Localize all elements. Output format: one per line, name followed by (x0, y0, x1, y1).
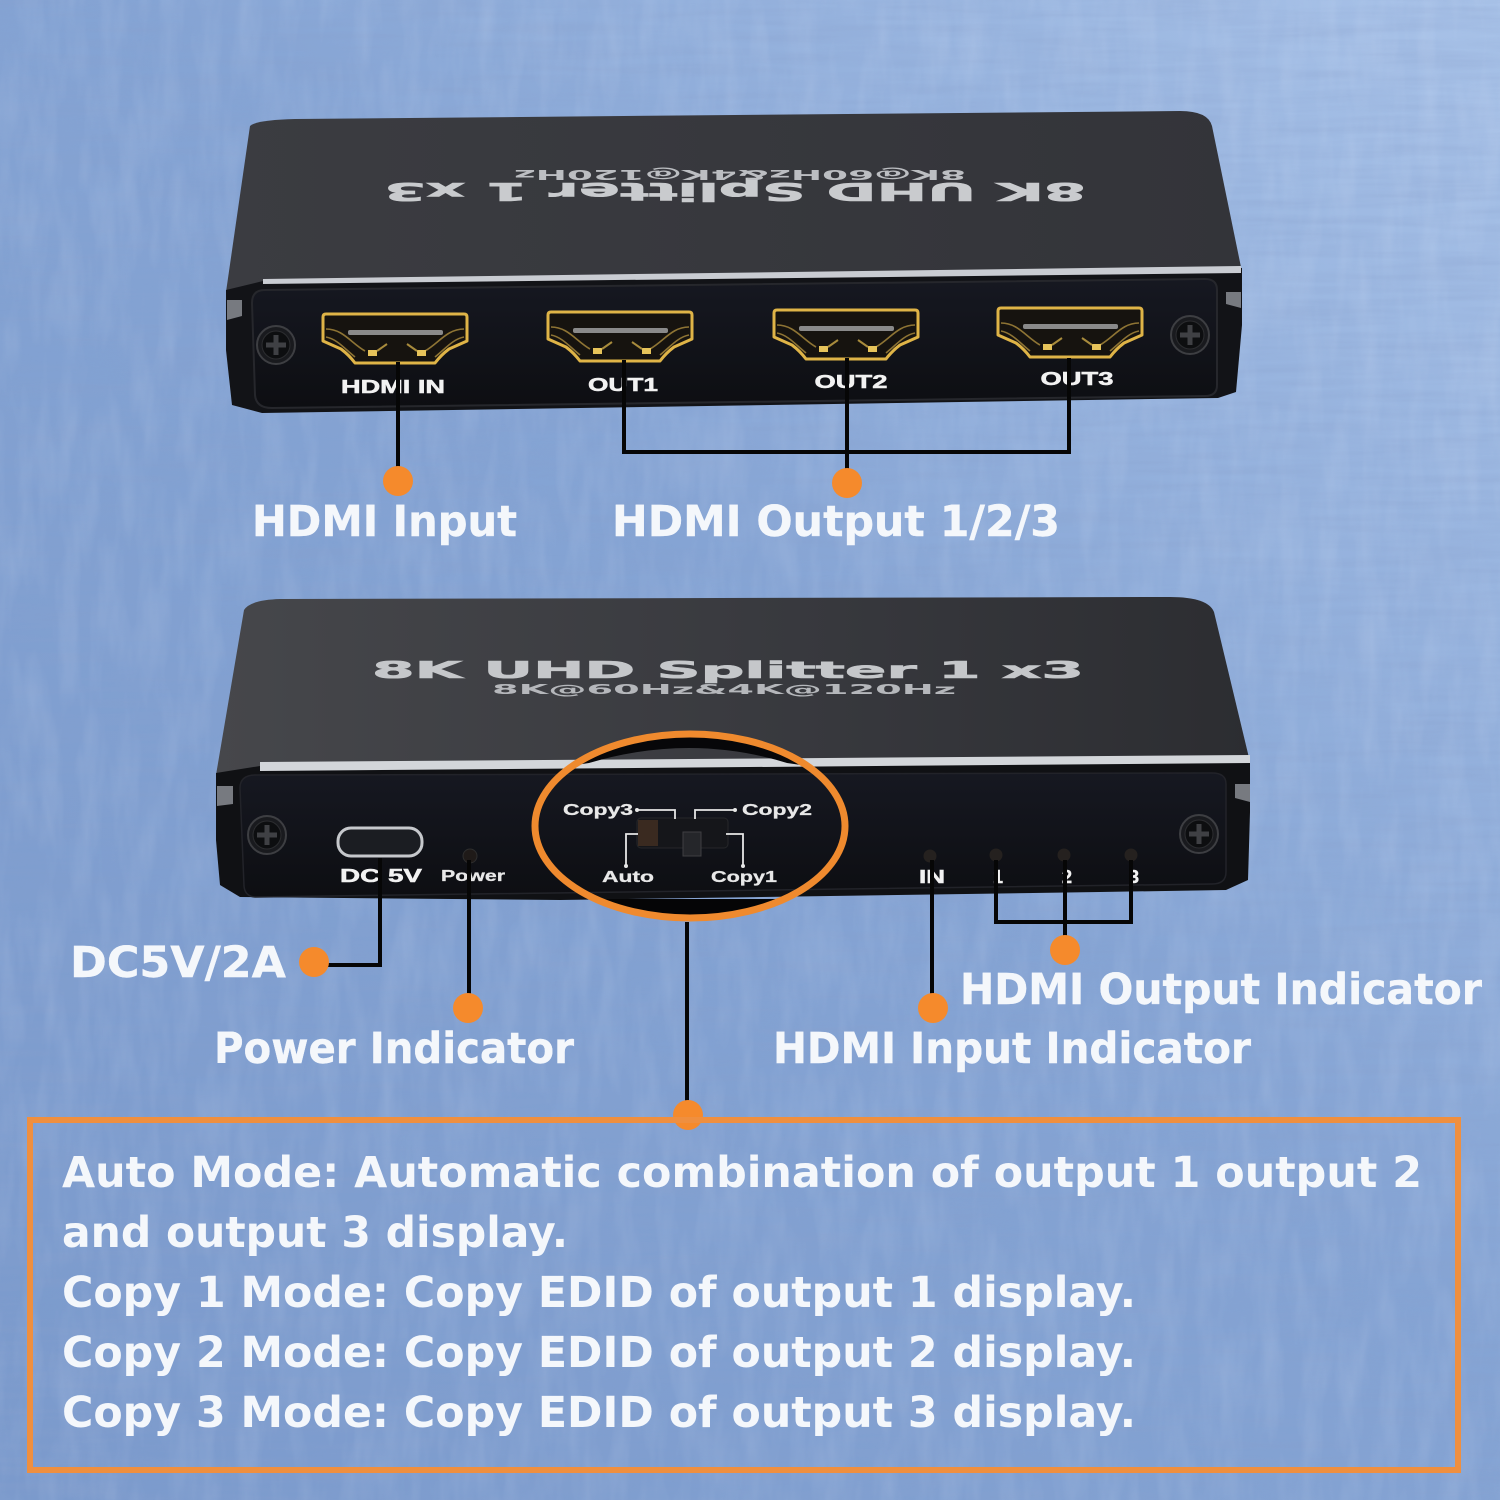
right screw (1180, 815, 1218, 853)
orange ellipse (535, 734, 845, 918)
OUT2 port (774, 310, 918, 359)
upside-down device title: 8K@60Hz&4K@120Hz (514, 166, 966, 181)
port labels: HDMI IN (341, 377, 445, 397)
label: HDMI Input: HDMI Input (252, 497, 517, 547)
callout: HDMI output connector (624, 358, 1069, 498)
callout: mode switch connector (673, 922, 703, 1130)
LED indicators (919, 848, 1139, 887)
upside-down device title: 8K UHD Splitter 1 x3 (384, 177, 1086, 206)
LED indicators: IN (919, 867, 945, 887)
switch labels: Copy2 (742, 802, 812, 819)
device title: 8K UHD Splitter 1 x3 (372, 658, 1084, 684)
upside-down device title (384, 166, 1086, 206)
switch labels: Copy1 (711, 869, 777, 886)
device body side (216, 757, 1250, 900)
text block: modes: and output 3 display. (62, 1208, 568, 1258)
text block: modes: Copy 1 Mode: Copy EDID of output 1 display. (62, 1268, 1136, 1318)
port labels: OUT2 (814, 372, 888, 392)
text block: modes (62, 1148, 1422, 1438)
bottom splitter device (216, 597, 1250, 929)
callout: HDMI input connector (383, 362, 413, 496)
label: HDMI Output Indicator: HDMI Output Indicator (960, 965, 1483, 1015)
device top surface (226, 111, 1242, 292)
device silver edge (260, 755, 1250, 771)
device title: 8K@60Hz&4K@120Hz (492, 683, 956, 698)
label: HDMI Input Indicator: HDMI Input Indicator (773, 1024, 1252, 1074)
device silver edge (263, 266, 1241, 284)
text block: modes: Auto Mode: Automatic combination of output 1 output 2 (62, 1148, 1422, 1198)
callout: HDMI output indicator connector (996, 860, 1131, 965)
callout: DC5V/2A connector (299, 858, 380, 977)
USB-C port (338, 828, 422, 856)
text block: modes: Copy 3 Mode: Copy EDID of output 3 display. (62, 1388, 1136, 1438)
label: HDMI Output 1/2/3: HDMI Output 1/2/3 (612, 497, 1060, 547)
label: DC5V/2A: DC5V/2A (70, 938, 287, 988)
LED indicators: 3 (1129, 867, 1139, 887)
right screw (1171, 316, 1209, 354)
left screw (257, 326, 295, 364)
device front panel (252, 279, 1217, 408)
switch labels: Auto (602, 869, 654, 886)
port labels: Power (441, 868, 505, 885)
panel: mode descriptions (30, 1120, 1458, 1470)
device top surface (216, 597, 1250, 775)
callout: power indicator connector (453, 860, 483, 1023)
switch labels: Copy3 (563, 802, 633, 819)
LED indicators: 1 (993, 867, 1003, 887)
mode switch highlight (530, 725, 850, 929)
side vent notches (227, 292, 1241, 320)
left screw (248, 816, 286, 854)
port labels: OUT3 (1040, 369, 1114, 389)
device body side (226, 268, 1242, 413)
HDMI IN port (323, 314, 467, 363)
slide switch (637, 818, 728, 856)
label: Power Indicator: Power Indicator (214, 1024, 575, 1074)
power LED (463, 849, 477, 863)
top splitter device (226, 111, 1242, 413)
OUT3 port (998, 308, 1142, 357)
port labels (341, 369, 1114, 397)
device title (372, 658, 1084, 698)
text block: modes: Copy 2 Mode: Copy EDID of output 2 display. (62, 1328, 1136, 1378)
OUT1 port (548, 312, 692, 361)
LED indicators: 2 (1062, 867, 1072, 887)
side vent notches (217, 784, 1250, 806)
device front panel (240, 773, 1226, 897)
dark crescents inside ring (582, 738, 800, 914)
callout: HDMI input indicator connector (918, 860, 948, 1023)
port labels: OUT1 (588, 375, 658, 395)
port labels: DC 5V (340, 866, 422, 886)
port labels (340, 866, 505, 886)
switch labels (563, 802, 812, 886)
